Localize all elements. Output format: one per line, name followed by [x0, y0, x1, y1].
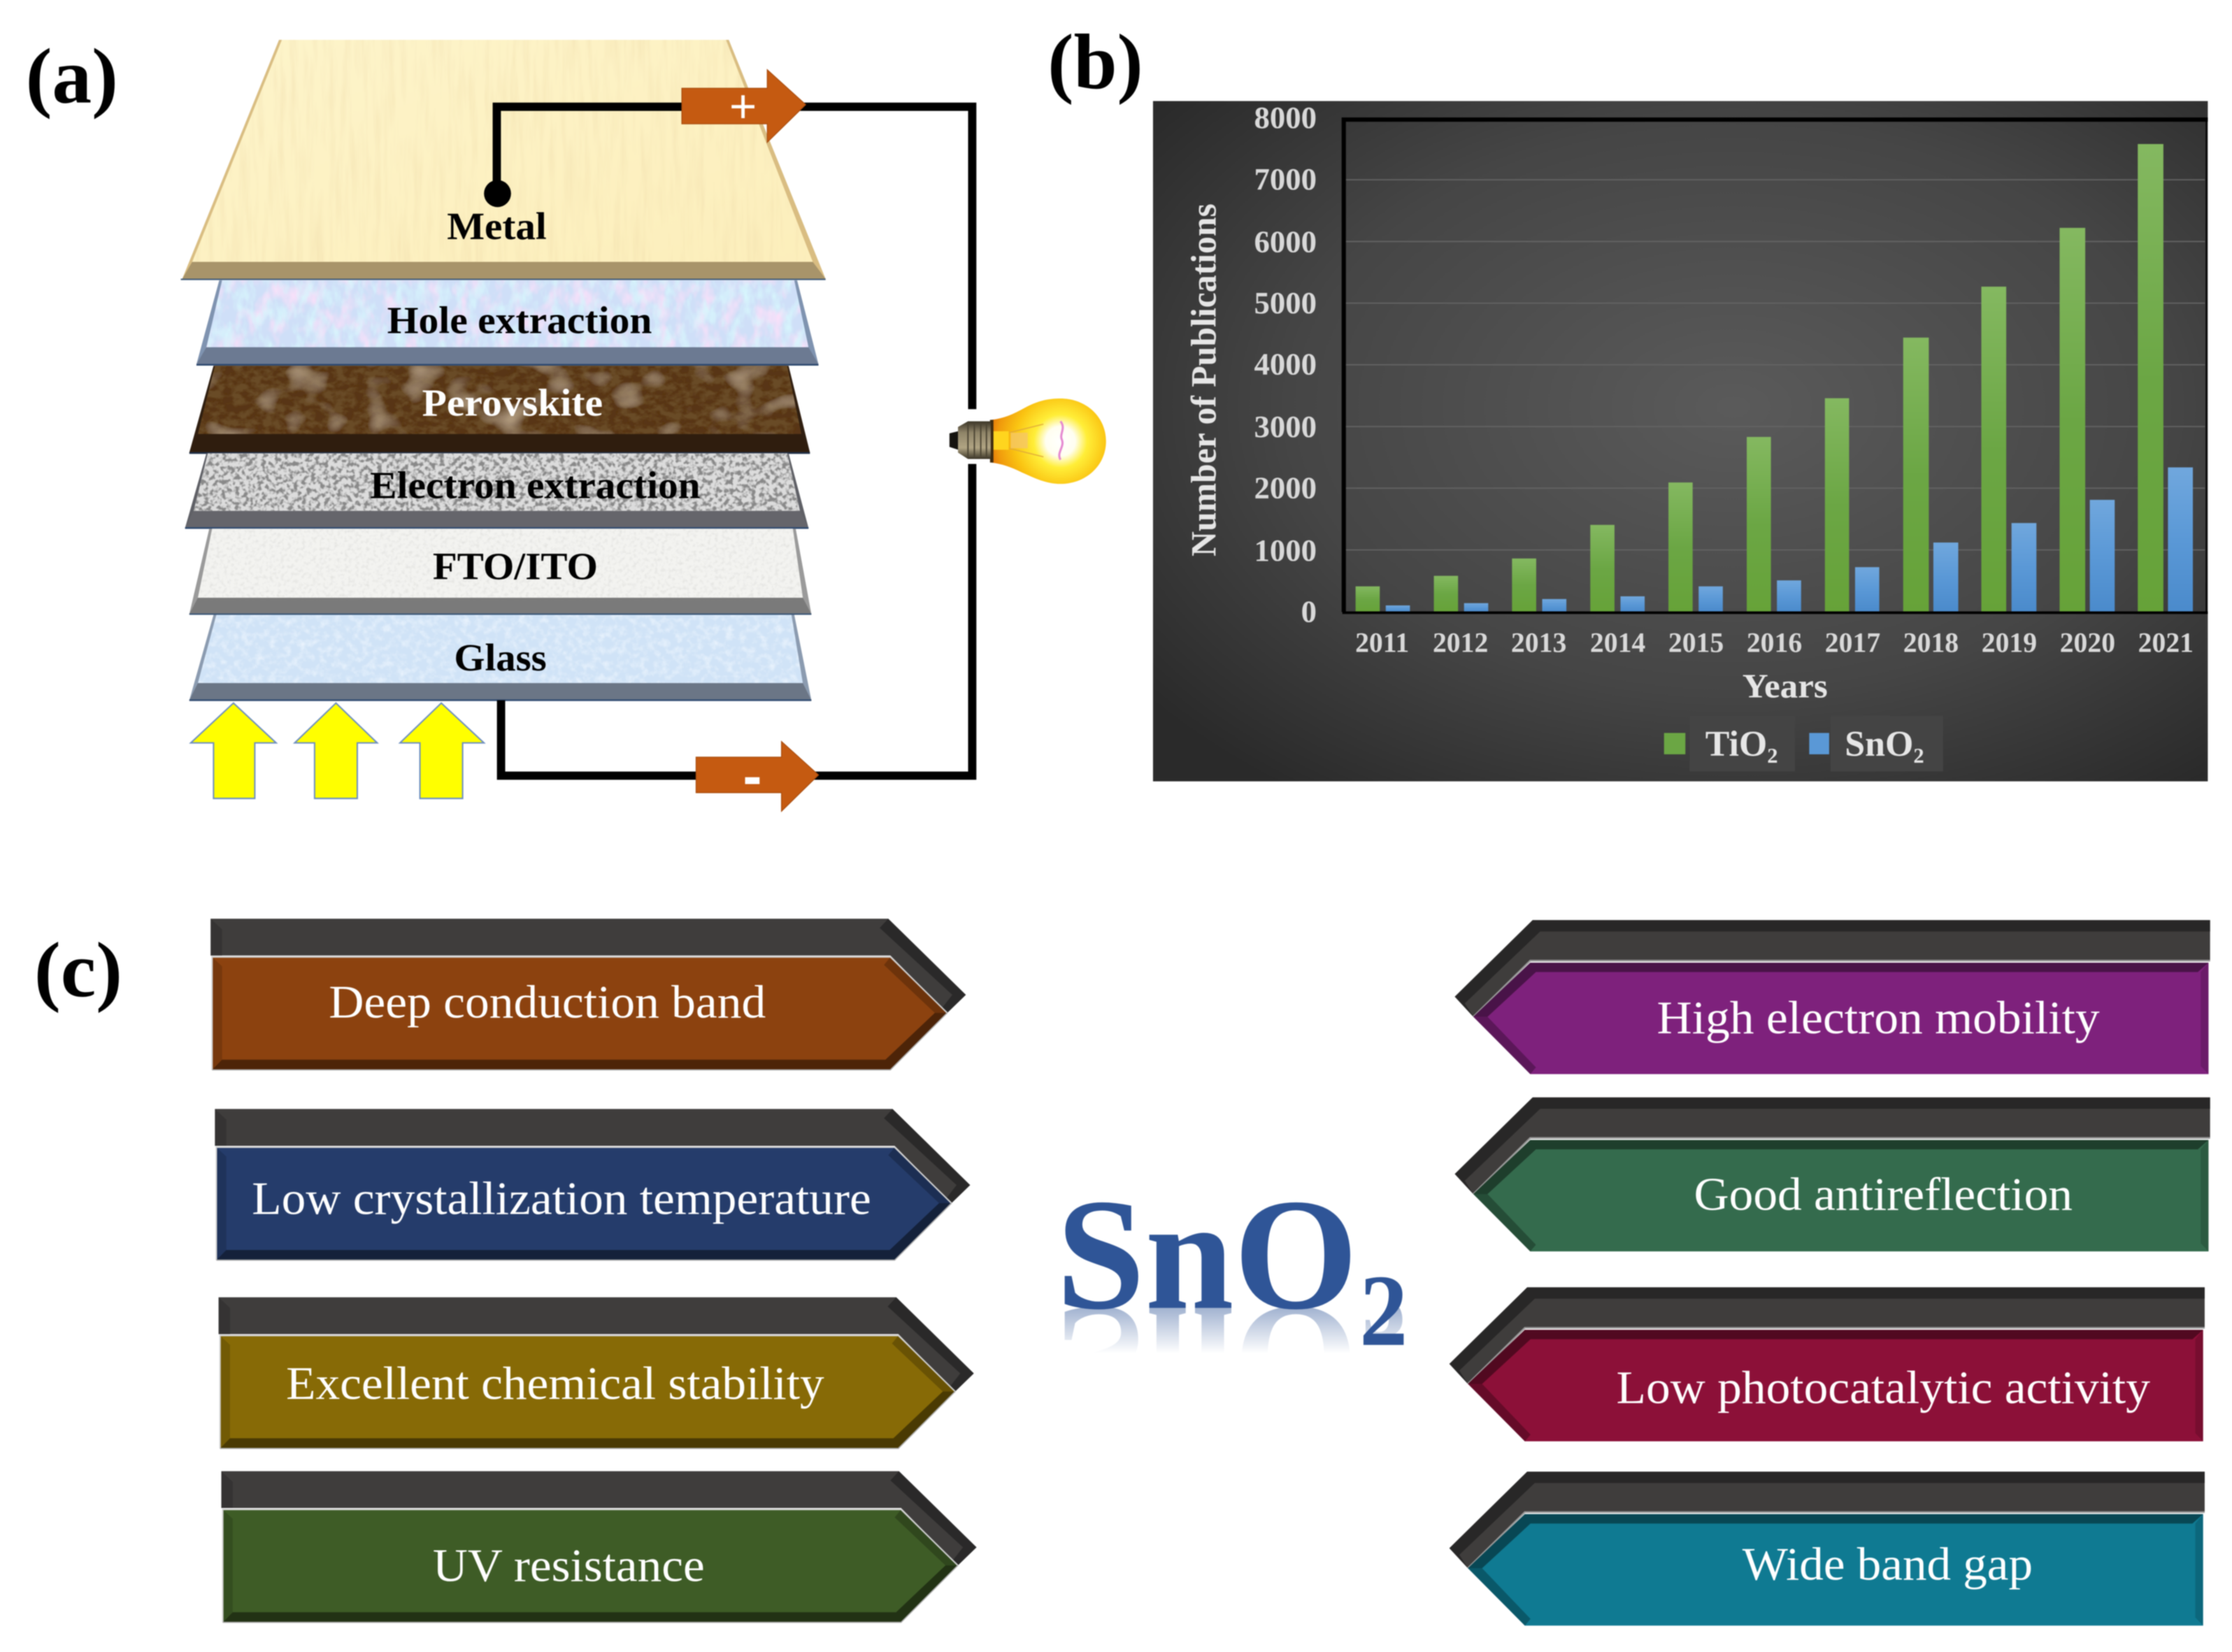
layer: metal: Metal — [447, 205, 547, 247]
TiO2 bars — [1356, 144, 2163, 612]
reflection — [1064, 1307, 1403, 1349]
y axis labels: 7000 — [1254, 161, 1317, 196]
panel: publications bar chart — [1153, 100, 2208, 782]
arrows: incident light — [191, 703, 484, 798]
y axis labels: 2000 — [1254, 471, 1317, 505]
layer: electron extraction: Electron extraction — [370, 464, 701, 507]
arrow: excellent chemical stability — [219, 1298, 974, 1449]
legend — [1664, 716, 1943, 771]
arrow: deep conduction band: Deep conduction band — [329, 976, 766, 1028]
icon: light bulb — [950, 398, 1106, 484]
SnO2 bars — [1386, 468, 2193, 612]
label (a): (a) — [26, 34, 118, 120]
layer: hole extraction — [196, 280, 819, 365]
title: SnO2 with reflection — [1064, 1201, 1404, 1349]
arrow: wide band gap — [1450, 1472, 2205, 1625]
arrow: negative terminal — [696, 742, 819, 811]
arrow: high electron mobility — [1454, 920, 2210, 1074]
layer: perovskite: Perovskite — [422, 381, 603, 424]
title: SnO2 with reflection: 2 — [1359, 1254, 1408, 1367]
legend: 2 — [1767, 744, 1778, 768]
arrow: wide band gap: Wide band gap — [1743, 1538, 2033, 1590]
layer: glass: Glass — [454, 636, 547, 679]
layer: FTO/ITO: FTO/ITO — [433, 545, 598, 588]
arrow: positive terminal: + — [729, 80, 757, 133]
plot frame — [1343, 120, 2208, 612]
x axis labels: 2013 — [1511, 627, 1566, 658]
arrow: positive terminal — [682, 70, 806, 143]
arrow: high electron mobility: High electron mobility — [1657, 991, 2100, 1044]
layer: glass — [189, 615, 811, 701]
y axis labels: 0 — [1301, 594, 1317, 629]
x axis labels: 2011 — [1355, 627, 1409, 658]
legend: SnO — [1845, 724, 1913, 764]
reflection: 2 — [1359, 1249, 1408, 1360]
arrow: good antireflection: Good antireflection — [1694, 1168, 2073, 1220]
arrow: low photocatalytic activity — [1450, 1287, 2205, 1442]
y axis labels: 3000 — [1254, 409, 1317, 444]
title: SnO2 with reflection: SnO — [1056, 1167, 1358, 1343]
y axis labels: 4000 — [1254, 346, 1317, 381]
legend: 2 — [1913, 744, 1924, 768]
circuit wire — [484, 107, 972, 775]
y axis title: Number of Publications — [1185, 203, 1224, 556]
layer: perovskite — [189, 366, 810, 453]
arrow: low photocatalytic activity: Low photocatalytic activity — [1617, 1361, 2150, 1414]
label (b): (b) — [1047, 19, 1143, 106]
x axis labels: 2012 — [1433, 627, 1488, 658]
layer: metal — [181, 40, 826, 280]
layer: FTO/ITO — [189, 529, 811, 614]
x axis labels: 2016 — [1747, 627, 1802, 658]
reflection: SnO — [1056, 1273, 1358, 1449]
x axis labels: 2015 — [1668, 627, 1724, 658]
label (c): (c) — [34, 927, 122, 1014]
x axis labels — [1355, 627, 2194, 658]
y axis labels: 6000 — [1254, 224, 1317, 259]
x axis labels: 2014 — [1590, 627, 1645, 658]
y axis labels: 5000 — [1254, 285, 1317, 320]
y axis labels: 1000 — [1254, 533, 1317, 568]
x axis labels: 2018 — [1903, 627, 1959, 658]
layer: hole extraction: Hole extraction — [387, 299, 652, 341]
x axis title: Years — [1743, 667, 1828, 705]
arrow: deep conduction band — [210, 919, 966, 1070]
x axis labels: 2021 — [2138, 627, 2194, 658]
arrow: excellent chemical stability: Excellent chemical stability — [286, 1357, 824, 1409]
x axis labels: 2019 — [1982, 627, 2037, 658]
grid lines and axes — [1344, 180, 2205, 550]
arrow: low crystallization temperature — [215, 1109, 970, 1260]
arrow: UV resistance — [222, 1471, 976, 1623]
y axis labels — [1254, 100, 1317, 629]
x axis labels: 2017 — [1825, 627, 1880, 658]
x axis labels: 2020 — [2060, 627, 2115, 658]
panel: perovskite solar cell stack — [181, 40, 826, 701]
arrow: UV resistance: UV resistance — [433, 1539, 705, 1592]
arrow: good antireflection — [1454, 1098, 2210, 1251]
arrow: low crystallization temperature: Low crystallization temperature — [252, 1172, 871, 1224]
arrow: negative terminal: - — [743, 745, 761, 808]
layer: electron extraction — [185, 453, 808, 528]
legend: TiO — [1705, 724, 1767, 764]
y axis labels: 8000 — [1254, 100, 1317, 135]
